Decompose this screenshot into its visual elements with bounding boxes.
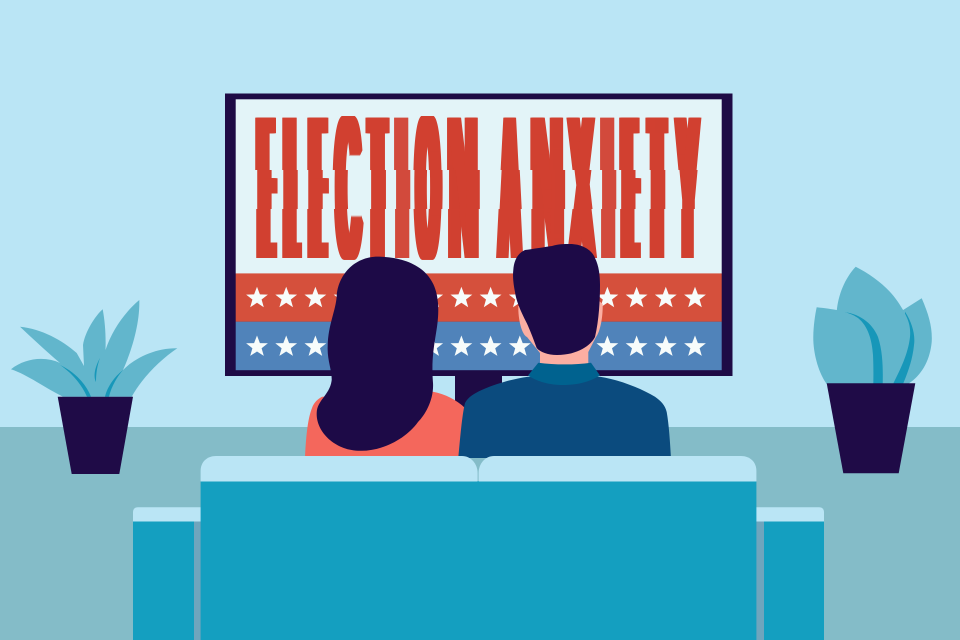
right plant centre leaf xyxy=(837,267,910,384)
left plant leaf shading xyxy=(60,358,123,397)
sofa xyxy=(133,456,824,640)
left plant pot xyxy=(58,397,133,474)
left back cushion xyxy=(201,456,478,482)
man shirt xyxy=(458,377,671,458)
woman coral top xyxy=(305,392,465,458)
floor xyxy=(0,427,960,640)
right plant front leaf shading xyxy=(842,312,883,384)
right plant xyxy=(813,267,932,473)
right plant back leaf xyxy=(895,298,932,384)
man xyxy=(458,244,671,458)
left armrest xyxy=(133,507,201,640)
left plant xyxy=(11,300,177,474)
tv frame xyxy=(225,94,732,376)
sofa back xyxy=(201,481,756,640)
blue banner xyxy=(236,322,722,370)
right plant pot xyxy=(827,383,915,473)
woman hair xyxy=(317,257,438,451)
woman xyxy=(305,257,465,458)
right plant front leaf xyxy=(813,307,873,384)
tv stand xyxy=(455,370,502,420)
red banner stars xyxy=(246,287,706,307)
right armrest xyxy=(756,507,824,640)
wall background xyxy=(0,0,960,427)
blue banner stars xyxy=(246,336,706,356)
man collar xyxy=(528,363,600,385)
left plant leaves xyxy=(11,300,177,397)
man hair xyxy=(513,244,600,355)
title: Election Anxiety glitched headline xyxy=(254,116,702,263)
right back cushion xyxy=(479,456,756,482)
tv screen xyxy=(236,99,722,274)
man neck and ears xyxy=(518,300,603,366)
right plant back leaf shading xyxy=(893,312,914,384)
red banner xyxy=(236,273,722,322)
